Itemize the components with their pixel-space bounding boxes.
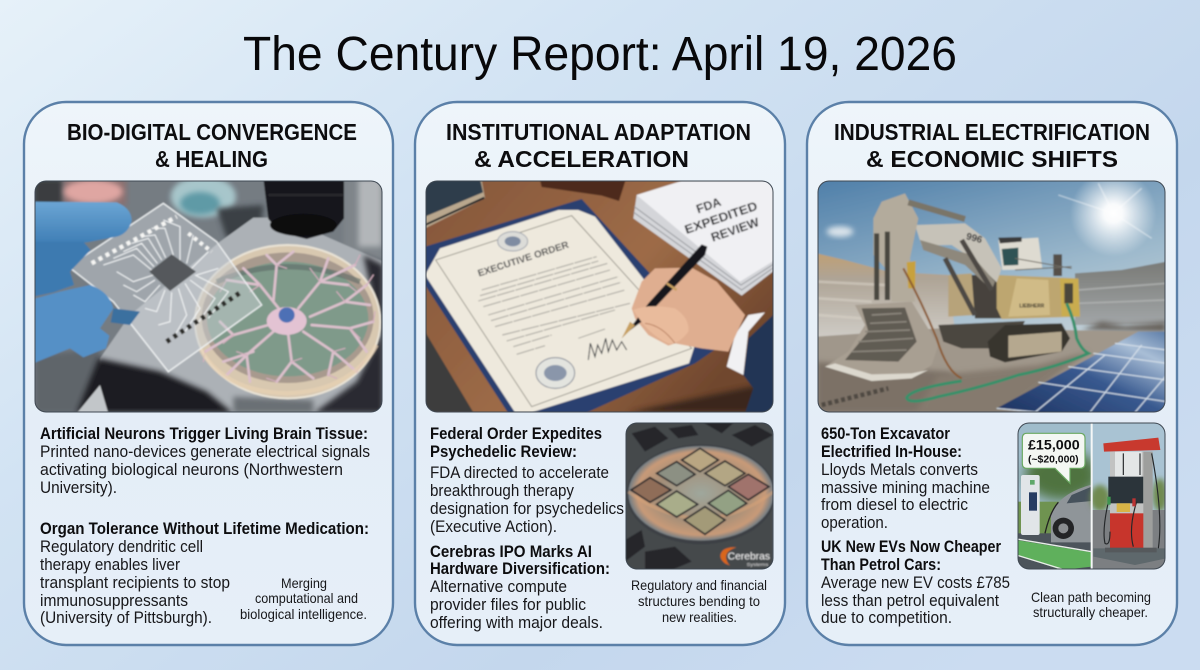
text block: artificial neurons: University).: [40, 479, 117, 497]
caption: clean path: Clean path becoming: [1031, 590, 1151, 605]
document in blue folder: EXECUTIVE ORDER: [477, 240, 570, 280]
signature: [588, 338, 627, 360]
text block: cerebras: [430, 543, 610, 632]
text block: excavator: Electrified In-House:: [821, 443, 962, 461]
heading: bio-digital: [67, 119, 357, 172]
excavator: LIEBHERR: [1019, 304, 1044, 310]
panel: industrial electrification and economic shifts: [807, 102, 1177, 645]
text block: UK EVs: UK New EVs Now Cheaper: [821, 538, 1002, 556]
logo: Cerebras: [720, 547, 770, 568]
text block: federal order: Federal Order Expedites: [430, 425, 602, 443]
solar panel array: [997, 332, 1167, 413]
text block: excavator: [821, 425, 990, 532]
logo: Cerebras: Systems: [747, 562, 769, 568]
text block: excavator: 650-Ton Excavator: [821, 425, 951, 443]
price callout: [1022, 433, 1085, 483]
heading: institutional: [446, 119, 751, 172]
text block: excavator: massive mining machine: [821, 479, 990, 497]
text block: excavator: operation.: [821, 514, 888, 532]
text block: federal order: breakthrough therapy: [430, 482, 575, 500]
caption: clean path: [1031, 590, 1151, 620]
caption: merging: computational and: [255, 591, 358, 606]
panel: bio-digital convergence and healing: [24, 102, 393, 645]
image: silicon wafer with chips: [625, 422, 776, 570]
text block: cerebras: Hardware Diversification:: [430, 560, 610, 578]
text block: organ tolerance: Regulatory dendritic cell: [40, 538, 203, 556]
image: flexible chip over neuron in petri dish: [33, 176, 383, 413]
bucket: [825, 302, 938, 381]
text block: federal order: [430, 425, 624, 536]
chips: [631, 448, 769, 534]
title: The Century Report: April 19, 2026: [243, 28, 957, 81]
text block: organ tolerance: Organ Tolerance Without Lifetime Medication:: [40, 520, 369, 538]
heading: institutional: & ACCELERATION: [474, 146, 689, 172]
text block: federal order: FDA directed to accelerate: [430, 464, 609, 482]
mine terraces: [817, 253, 1167, 338]
panel: institutional adaptation and acceleration: [415, 102, 785, 645]
price callout: £15,000: [1028, 436, 1080, 452]
icon: hand with pen: [622, 244, 775, 413]
text block: excavator: from diesel to electric: [821, 496, 968, 514]
text block: cerebras: provider files for public: [430, 596, 586, 614]
heading: institutional: INSTITUTIONAL ADAPTATION: [446, 119, 751, 145]
left scene: EV: [1018, 424, 1091, 568]
right scene: petrol pump: [1090, 422, 1167, 572]
text block: organ tolerance: immunosuppressants: [40, 592, 188, 610]
image: EV charger versus petrol pump: [1017, 422, 1167, 572]
icon: stack of papers: EXPEDITED: [683, 199, 759, 237]
caption: merging: Merging: [281, 576, 327, 591]
price callout: (~$20,000): [1028, 455, 1079, 466]
icon: microscope objective: [263, 178, 344, 239]
caption: regulatory: new realities.: [662, 610, 737, 625]
caption: clean path: structurally cheaper.: [1033, 605, 1148, 620]
green power cable: [907, 303, 1088, 401]
text block: artificial neurons: [40, 425, 370, 497]
text block: UK EVs: [821, 538, 1010, 627]
image: executive order being signed: [425, 180, 775, 413]
icon: stack of papers: FDA: [694, 195, 723, 216]
text block: organ tolerance: therapy enables liver: [40, 556, 180, 574]
text block: artificial neurons: activating biological neurons (Northwestern: [40, 461, 343, 479]
caption: regulatory: Regulatory and financial: [631, 578, 767, 593]
icon: stack of papers: REVIEW: [709, 215, 761, 245]
text block: federal order: Psychedelic Review:: [430, 443, 577, 461]
heading: industrial: & ECONOMIC SHIFTS: [866, 146, 1118, 172]
text block: organ tolerance: [40, 520, 369, 627]
heading: bio-digital: BIO-DIGITAL CONVERGENCE: [67, 119, 357, 145]
text block: UK EVs: due to competition.: [821, 609, 952, 627]
text block: cerebras: Cerebras IPO Marks AI: [430, 543, 592, 561]
icon: bottom seal: [536, 358, 575, 388]
text block: organ tolerance: (University of Pittsburgh).: [40, 609, 212, 627]
heading: industrial: [834, 119, 1150, 172]
image: electrified excavator at mine: [817, 170, 1167, 413]
icon: book: [425, 180, 485, 228]
text block: artificial neurons: Printed nano-devices generate electrical signals: [40, 443, 370, 461]
heading: bio-digital: & HEALING: [155, 146, 268, 172]
icon: flexible circuit film: [68, 203, 262, 372]
text block: artificial neurons: Artificial Neurons Trigger Living Brain Tissue:: [40, 425, 368, 443]
icon: stack of papers: [633, 181, 775, 296]
text block: UK EVs: Average new EV costs £785: [821, 574, 1010, 592]
icon: blue gloved fingers: [33, 202, 140, 363]
text block: organ tolerance: transplant recipients to stop: [40, 574, 230, 592]
petri dish with neuron: [195, 245, 380, 398]
caption: merging: [240, 576, 367, 622]
caption: merging: biological intelligence.: [240, 607, 367, 622]
text block: UK EVs: Than Petrol Cars:: [821, 556, 941, 574]
excavator: 996: [965, 231, 984, 246]
caption: regulatory: structures bending to: [638, 594, 760, 609]
text block: excavator: Lloyds Metals converts: [821, 461, 978, 479]
caption: regulatory: [631, 578, 767, 625]
icon: top seal: [498, 232, 528, 251]
text block: federal order: designation for psychedelics: [430, 500, 624, 518]
document in blue folder: [425, 199, 717, 413]
text block: UK EVs: less than petrol equivalent: [821, 592, 999, 610]
excavator: [825, 193, 1080, 381]
orange hydraulic hose: [903, 268, 962, 378]
text block: cerebras: Alternative compute: [430, 578, 567, 596]
heading: industrial: INDUSTRIAL ELECTRIFICATION: [834, 119, 1150, 145]
logo: Cerebras: Cerebras: [728, 552, 770, 563]
text block: federal order: (Executive Action).: [430, 518, 557, 536]
text block: cerebras: offering with major deals.: [430, 614, 603, 632]
